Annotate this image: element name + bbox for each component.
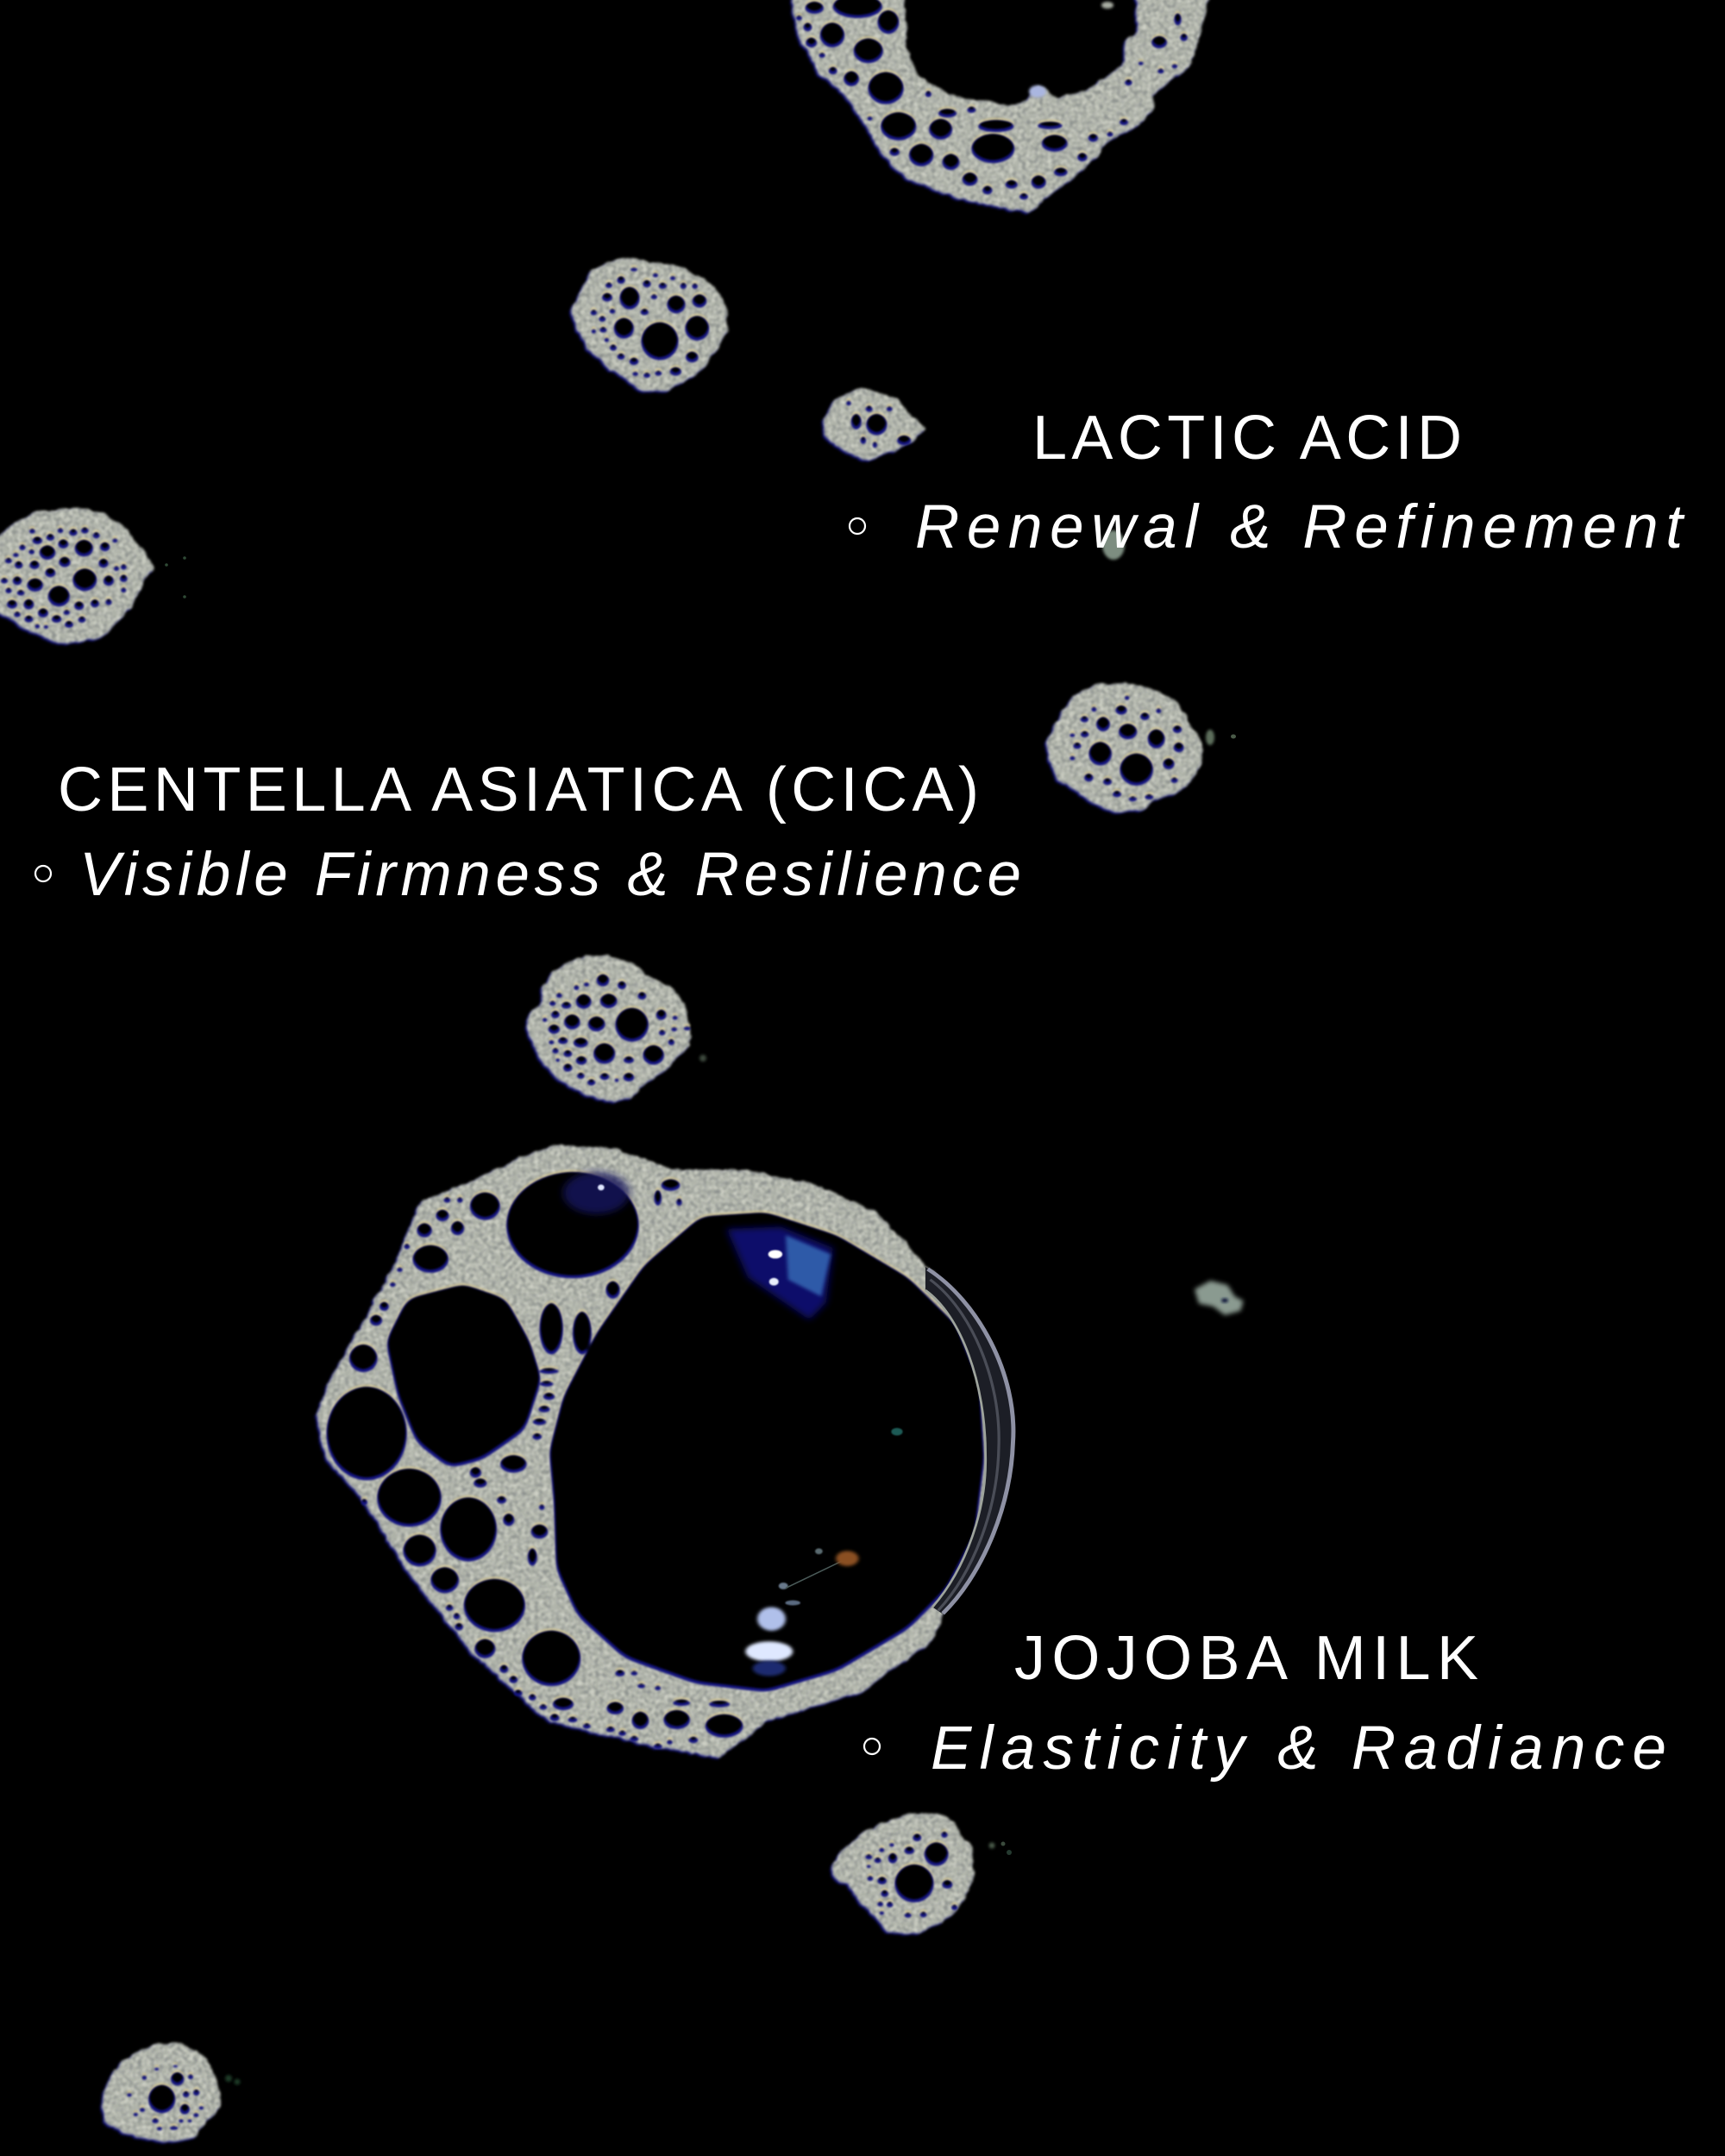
heading: jojoba milk: JOJOBA MILK (1014, 1624, 1478, 1693)
icon: faint speck behind renewal text (1102, 530, 1125, 560)
icon: tiny foam speck (1195, 1281, 1244, 1315)
icon: foam bubble upper centre (571, 257, 727, 391)
icon: small foam bubble beside lactic acid (823, 386, 927, 461)
icon: foam bubble below centella text (526, 955, 706, 1102)
icon: foam ring at top (788, 0, 1212, 212)
icon: foam bubble right of centella heading (1046, 683, 1236, 812)
sparkles at bottom of clear bubble (745, 1428, 903, 1676)
heading: centella asiatica: CENTELLA ASIATICA (CICA) (58, 755, 979, 824)
blue reflection inside clear bubble (563, 1172, 833, 1319)
glassy right rim of the big bubble (925, 1267, 1013, 1614)
text block: elasticity and radiance bullet: Elasticity & Radiance (931, 1714, 1666, 1783)
icon: foam bubble at left edge (0, 507, 186, 644)
text block: visible firmness and resilience bullet: Visible Firmness & Resilience (79, 841, 1021, 909)
text block: renewal and refinement bullet: Renewal & Refinement (915, 493, 1685, 561)
icon: foam bubble lower centre (831, 1813, 1012, 1934)
heading: lactic acid: LACTIC ACID (1032, 404, 1462, 473)
icon: foam bubble bottom left (101, 2044, 240, 2141)
icon: large foam bubble cluster with big clear bubble (317, 1144, 1013, 1757)
